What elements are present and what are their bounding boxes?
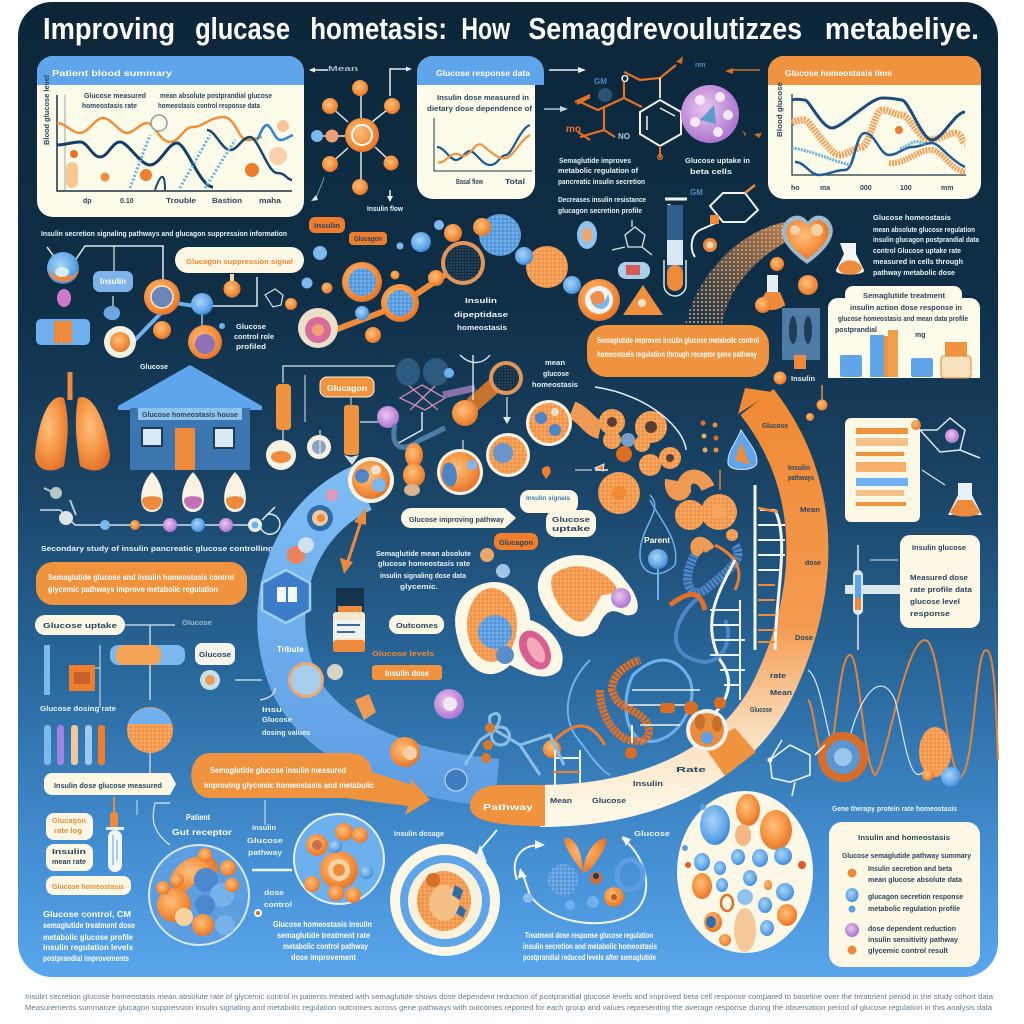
- panel: legend: Glucose semaglutide pathway summary: [842, 853, 971, 860]
- text blocks bottom: semaglutide treatment dose: [43, 921, 135, 930]
- text block: right: pathway metabolic dose: [873, 270, 955, 277]
- orange label pill: Glucagon: [327, 384, 367, 393]
- arc labels: Glucose: [750, 707, 772, 714]
- panel: bar chart: insulin action dose response in: [850, 305, 962, 312]
- big dotted circle: [677, 791, 813, 953]
- molecule caption text: pancreatic insulin secretion: [558, 179, 645, 186]
- text block: right: mean absolute glucose regulation: [873, 227, 975, 234]
- text block: right: measured in cells through: [873, 259, 963, 266]
- molecule caption text: beta cells: [690, 169, 732, 176]
- callout: orange banner top right: Semaglutide improves insulin glucose metabolic control: [597, 336, 759, 345]
- text block center left: dose improvement: [291, 953, 356, 962]
- arc icons: Insu: [262, 707, 282, 714]
- icon: vertical tube: [106, 797, 137, 872]
- panel: tube callout: rate profile data: [910, 587, 972, 594]
- panel: glucose line chart: Patient blood summary: [52, 69, 173, 78]
- labels: Glucose: [634, 831, 670, 838]
- cream cell kidney shape: [538, 555, 638, 637]
- panel: glucose line chart: mean absolute postprandial glucose: [160, 93, 272, 100]
- footer text: Insulin secretion glucose homeostasis mean absolute rate of glycemic control in patients treated with semaglutide shows dose dependent reduction of postprandial glucose levels and improved beta cell response compared to baseline over the treatment period in the study cohort data: [25, 994, 993, 1001]
- hub arrows and labels: [309, 66, 412, 213]
- panel: glucose line chart: homeostasis rate: [82, 103, 137, 110]
- DNA helix: Parent: [644, 536, 670, 545]
- center text: glycemic.: [400, 584, 438, 591]
- icons: capsule test tube molecule: [577, 185, 758, 296]
- panel: bar chart: mg: [915, 332, 926, 339]
- panel: bar chart: [828, 286, 980, 378]
- panel: glucose line chart: Bastion: [212, 198, 242, 205]
- panel: dense line chart: 100: [900, 185, 912, 192]
- caption above network: Insulin secretion signaling pathways and glucagon suppression information: [41, 231, 287, 238]
- centered caption: [454, 298, 508, 332]
- cell and molecule bottom right: [768, 727, 961, 796]
- panel: small line chart: [417, 56, 544, 199]
- icon: lungs: [35, 372, 110, 470]
- title: Semagdrevoulutizzes: [521, 11, 802, 46]
- chart markers: [66, 115, 289, 188]
- text blocks bottom: [43, 910, 135, 963]
- big orange arc: [540, 402, 807, 806]
- label pill and tools: Glucose dosing rate: [40, 706, 116, 713]
- floating particles: [700, 420, 757, 490]
- cell group captions: Insulin: [252, 825, 276, 832]
- molecule caption text: metabolic regulation of: [558, 168, 639, 175]
- arc labels: Mean: [800, 507, 820, 514]
- centered caption: Insulin: [465, 298, 497, 305]
- bubbles and text: Glucose improving pathway: [409, 517, 504, 524]
- arc labels: Dose: [795, 635, 813, 642]
- small text center top: homeostasis: [532, 382, 578, 389]
- panel: legend: mean glucose absolute data: [868, 877, 962, 884]
- text blocks bottom: insulin regulation levels: [43, 943, 134, 952]
- icon: house: [118, 364, 262, 470]
- arc labels: rate: [770, 673, 786, 680]
- cell group captions: pathway: [248, 850, 282, 857]
- center text: insulin signaling dose data: [380, 573, 466, 580]
- molecule diagram: O: [657, 153, 663, 162]
- flow network: profiled: [236, 344, 266, 351]
- cell group captions: Gut receptor: [172, 828, 232, 837]
- small text center top: [532, 360, 578, 389]
- callout: orange banner top right: [587, 325, 769, 377]
- molecule diagram: [566, 56, 706, 162]
- molecule diagram: NO: [618, 132, 630, 141]
- panel: glucose line chart: 0.10: [120, 198, 134, 205]
- callout: orange label pill: [175, 247, 304, 273]
- pills left stack: [46, 813, 131, 895]
- molecule diagram: O: [621, 74, 629, 85]
- bubbles and text: [401, 490, 596, 578]
- title: hometasis:: [303, 11, 447, 46]
- text blocks bottom: metabolic glucose profile: [43, 933, 134, 942]
- cell: orange circle: [294, 814, 384, 904]
- label pill and tools: Glucose uptake: [43, 623, 117, 630]
- panel: strips list: [845, 418, 920, 522]
- icon: medicine bottle: [333, 588, 365, 652]
- labels: [394, 831, 670, 838]
- icon: orange flask: [922, 470, 982, 516]
- molecule caption text: Glucose uptake in: [685, 158, 750, 165]
- label pill and tools: Glucose: [182, 620, 212, 627]
- panel: dense line chart: Blood glucose: [777, 82, 784, 137]
- molecule diagram: GM: [594, 77, 607, 86]
- text block: right: Glucose homeostasis: [873, 215, 951, 222]
- flow network: control role: [234, 334, 274, 341]
- icon: gene chart tile: [782, 308, 820, 369]
- cell cluster: [298, 214, 663, 348]
- waves: [808, 640, 998, 778]
- pills left stack: mean rate: [52, 859, 86, 866]
- arc icons: Tribute: [277, 645, 304, 654]
- molecule caption text: Semaglutide improves: [559, 158, 631, 165]
- arc labels: Glucose: [762, 423, 788, 430]
- flow network: Insulin: [100, 277, 126, 286]
- panel: small line chart: Total: [505, 179, 525, 186]
- label dot: Insulin: [791, 376, 815, 383]
- panel: bar chart: glucose homeostasis and mean data profile: [838, 316, 968, 323]
- centered caption: dipeptidase: [454, 312, 508, 319]
- cell group captions: Glucose: [247, 838, 283, 845]
- panel: glucose line chart: [37, 56, 304, 217]
- callout: left orange banner: Semaglutide glucose and insulin homeostasis control: [48, 573, 234, 582]
- cycle diagram: [515, 836, 646, 923]
- arc start label: Glucose: [592, 798, 626, 805]
- text blocks bottom: postprandial improvements: [43, 954, 129, 963]
- cell group captions: dose: [264, 890, 284, 897]
- center text: glucose homeostasis rate: [378, 561, 470, 568]
- panel: tube callout: Insulin glucose: [912, 545, 966, 552]
- text block: right: [873, 215, 979, 277]
- panel: tube callout: glucose level: [910, 599, 960, 606]
- top arrows: [544, 67, 762, 138]
- bubbles and text: Insulin signals: [526, 496, 571, 502]
- panel: legend: metabolic regulation profile: [868, 906, 960, 913]
- arc icons: dosing values: [262, 730, 310, 737]
- center text: Semaglutide mean absolute: [376, 551, 471, 558]
- cell group captions: [153, 800, 292, 917]
- dotted trail to heart: [685, 222, 790, 325]
- panel: small line chart: dietary dose dependence of: [427, 106, 533, 113]
- text block center left: [273, 920, 372, 962]
- text block: right: insulin glucagon postprandial data: [873, 237, 979, 244]
- panel: dense line chart: [768, 56, 981, 199]
- receptor x shape: [394, 355, 523, 496]
- arc start label: Insulin: [633, 781, 663, 788]
- molecule caption text: [558, 158, 750, 215]
- footer text: [25, 994, 993, 1012]
- callout: left orange banner: glycemic pathways improve metabolic regulation: [48, 585, 218, 594]
- big blue arc: [281, 488, 497, 783]
- arc labels: dose: [805, 560, 821, 567]
- title: How: [455, 11, 511, 46]
- small text center top: mean: [545, 360, 565, 367]
- panel: legend: glucagon secretion response: [868, 894, 963, 901]
- icon: purple cell: [681, 85, 739, 143]
- cell circles: [320, 430, 530, 503]
- footer text: Measurements summarize glucagon suppression insulin signaling and metabolic regulation outcomes across gene pathways with outcomes reported for each group and values representing the average response during the observation period of glucose regulation in this analysis data: [25, 1005, 992, 1012]
- icon: heart: [782, 216, 833, 264]
- molecule diagram: mo: [566, 124, 581, 135]
- panel: glucose line chart: dp: [83, 198, 92, 205]
- ladder right: [755, 485, 785, 650]
- caption above legend: Gene therapy protein rate homeostasis: [832, 806, 957, 813]
- panel: small line chart: Basal flow: [456, 179, 483, 186]
- panel: dense line chart: Glucose homeostasis time: [785, 69, 893, 78]
- arc start label: Pathway: [483, 803, 534, 812]
- label pill and tools: Glucose: [199, 652, 231, 659]
- pills left stack: rate log: [54, 828, 82, 835]
- DNA helix: [543, 495, 745, 785]
- icons: capsule test tube molecule: GM: [690, 188, 703, 197]
- callout: orange arrow banner: Semaglutide glucose insulin measured: [210, 766, 346, 775]
- caption: Secondary study of insulin pancreatic glucose controlling: [41, 546, 273, 553]
- panel: dense line chart: mm: [941, 185, 953, 192]
- callout: left orange banner: [36, 562, 247, 605]
- cell: concentric ring: [390, 830, 500, 956]
- text block center left: semaglutide treatment rate: [277, 931, 370, 940]
- cell pair: [455, 555, 638, 676]
- panel: bar chart: Semaglutide treatment: [863, 293, 946, 300]
- callout: orange banner top right: homeostasis regulation through receptor gene pathway: [597, 350, 757, 359]
- panel: glucose line chart: homeostasis control response data: [158, 103, 260, 110]
- mini bars: [44, 725, 105, 765]
- text block center right: [523, 931, 657, 962]
- label pills center: Insulin dose: [385, 669, 430, 678]
- panel: dense line chart: 000: [860, 185, 872, 192]
- label pills center: Outcomes: [396, 623, 438, 630]
- panel: legend: Insulin and homeostasis: [858, 835, 950, 842]
- pills left stack: Insulin: [52, 849, 86, 856]
- panel: bar chart: postprandial: [835, 327, 877, 334]
- arc labels: Mean: [770, 690, 792, 697]
- orange small labels: Glucagon: [354, 236, 382, 243]
- callout: orange arrow banner: [191, 753, 430, 815]
- small text center top: glucose: [543, 371, 569, 378]
- callout: white flag: Insulin dose glucose measured: [54, 783, 162, 790]
- bubbles and text: Glucose: [552, 517, 590, 524]
- arrowhead: [738, 388, 772, 414]
- label pills center: Glucose levels: [372, 651, 434, 658]
- panel: glucose line chart: Blood glucose level: [44, 75, 51, 145]
- arc labels: [750, 423, 821, 714]
- orange small labels: Insulin: [314, 223, 340, 230]
- flow network: Glucose: [236, 324, 266, 331]
- text block center left: Glucose homeostasis insulin: [273, 920, 372, 929]
- arc labels: pathways: [788, 475, 814, 482]
- molecule diagram: nm: [695, 62, 706, 69]
- icons: three flask ovals: [141, 472, 246, 512]
- cell group captions: control: [264, 902, 292, 909]
- callout: orange arrow banner: improving glycemic homeostasis and metabolic: [204, 781, 375, 790]
- panel: tube callout: response: [910, 611, 950, 618]
- text block: right: control Glucose uptake rate: [873, 248, 961, 255]
- text block center left: metabolic control pathway: [283, 942, 368, 951]
- cream cell with nucleus: [455, 582, 563, 676]
- orange chain: [526, 387, 738, 555]
- arc icons: Glucose: [262, 717, 292, 724]
- label pill and tools: [35, 615, 262, 713]
- icon: orange ball: [127, 707, 173, 773]
- icon: house: Glucose homeostasis house: [142, 412, 238, 419]
- pills left stack: Glucagon: [52, 818, 86, 825]
- icon: right molecule: [806, 385, 980, 458]
- title: glucase: [188, 11, 290, 46]
- text block center right: Treatment dose response glucose regulation: [525, 931, 653, 940]
- label dot: [774, 372, 815, 384]
- title: metabeliye.: [817, 11, 979, 46]
- label pills center: [372, 615, 444, 680]
- pills left stack: Glucose homeostasis: [52, 884, 124, 891]
- cell group captions: Patient: [186, 813, 210, 822]
- molecule caption text: glucagon secretion profile: [558, 208, 642, 215]
- chain pathway: [40, 487, 262, 532]
- panel: legend: dose dependent reduction: [868, 926, 956, 933]
- cell: blue orange cluster: [149, 845, 249, 945]
- text block center right: postprandial reduced levels after semaglutide: [523, 953, 656, 962]
- icon: house: Glucose: [140, 364, 168, 371]
- panel: legend: glycemic control result: [868, 948, 949, 955]
- panel: legend: insulin sensitivity pathway: [868, 937, 958, 944]
- cell on arc end: [686, 709, 728, 751]
- hub arrows and labels: Insulin flow: [367, 206, 404, 213]
- orange small labels: [309, 217, 387, 245]
- panel: small line chart: Insulin dose measured in: [437, 95, 529, 102]
- text blocks bottom: Glucose control, CM: [43, 910, 131, 919]
- bubbles and text: Glucagon: [499, 540, 533, 547]
- text block center right: insulin secretion and metabolic homeostasis: [523, 942, 657, 951]
- panel: legend: [829, 822, 980, 967]
- icon: test tube horizontal: [845, 545, 900, 650]
- arc start label: Mean: [550, 798, 572, 805]
- callout: orange label pill: Glucagon suppression signal: [186, 259, 293, 266]
- icons: flasks: [755, 243, 864, 313]
- title: Improving: [43, 11, 175, 46]
- hub diagram: [311, 80, 400, 195]
- panel: dense line chart: ho: [791, 185, 800, 192]
- flow network: [36, 246, 297, 359]
- bubbles and text: uptake: [552, 526, 590, 533]
- center text: [376, 551, 471, 591]
- double arrow: [340, 508, 366, 574]
- panel: tube callout: [900, 535, 980, 628]
- panel: tube callout: Measured dose: [910, 575, 968, 582]
- panel: legend: Insulin secretion and beta: [868, 866, 952, 873]
- arc icons: [260, 462, 467, 791]
- cells row: [266, 366, 399, 470]
- arc labels: Insulin: [788, 465, 810, 472]
- labels: Insulin dosage: [394, 831, 444, 838]
- panel: glucose line chart: Glucose measured: [84, 93, 146, 100]
- panel: glucose line chart: maha: [259, 198, 281, 205]
- arc start label: [470, 728, 756, 826]
- hub arrows and labels: Mean: [328, 66, 358, 73]
- panel: dense line chart: ma: [820, 185, 830, 192]
- molecule caption text: Decreases insulin resistance: [558, 197, 646, 204]
- callout: white flag: [44, 773, 176, 795]
- panel: small line chart: Glucose response data: [436, 69, 531, 78]
- centered caption: homeostasis: [457, 325, 507, 332]
- panel: glucose line chart: Trouble: [166, 198, 196, 205]
- small molecule bottom center: [434, 689, 564, 775]
- arc start label: Rate: [676, 767, 706, 774]
- orange label pill: [320, 377, 374, 397]
